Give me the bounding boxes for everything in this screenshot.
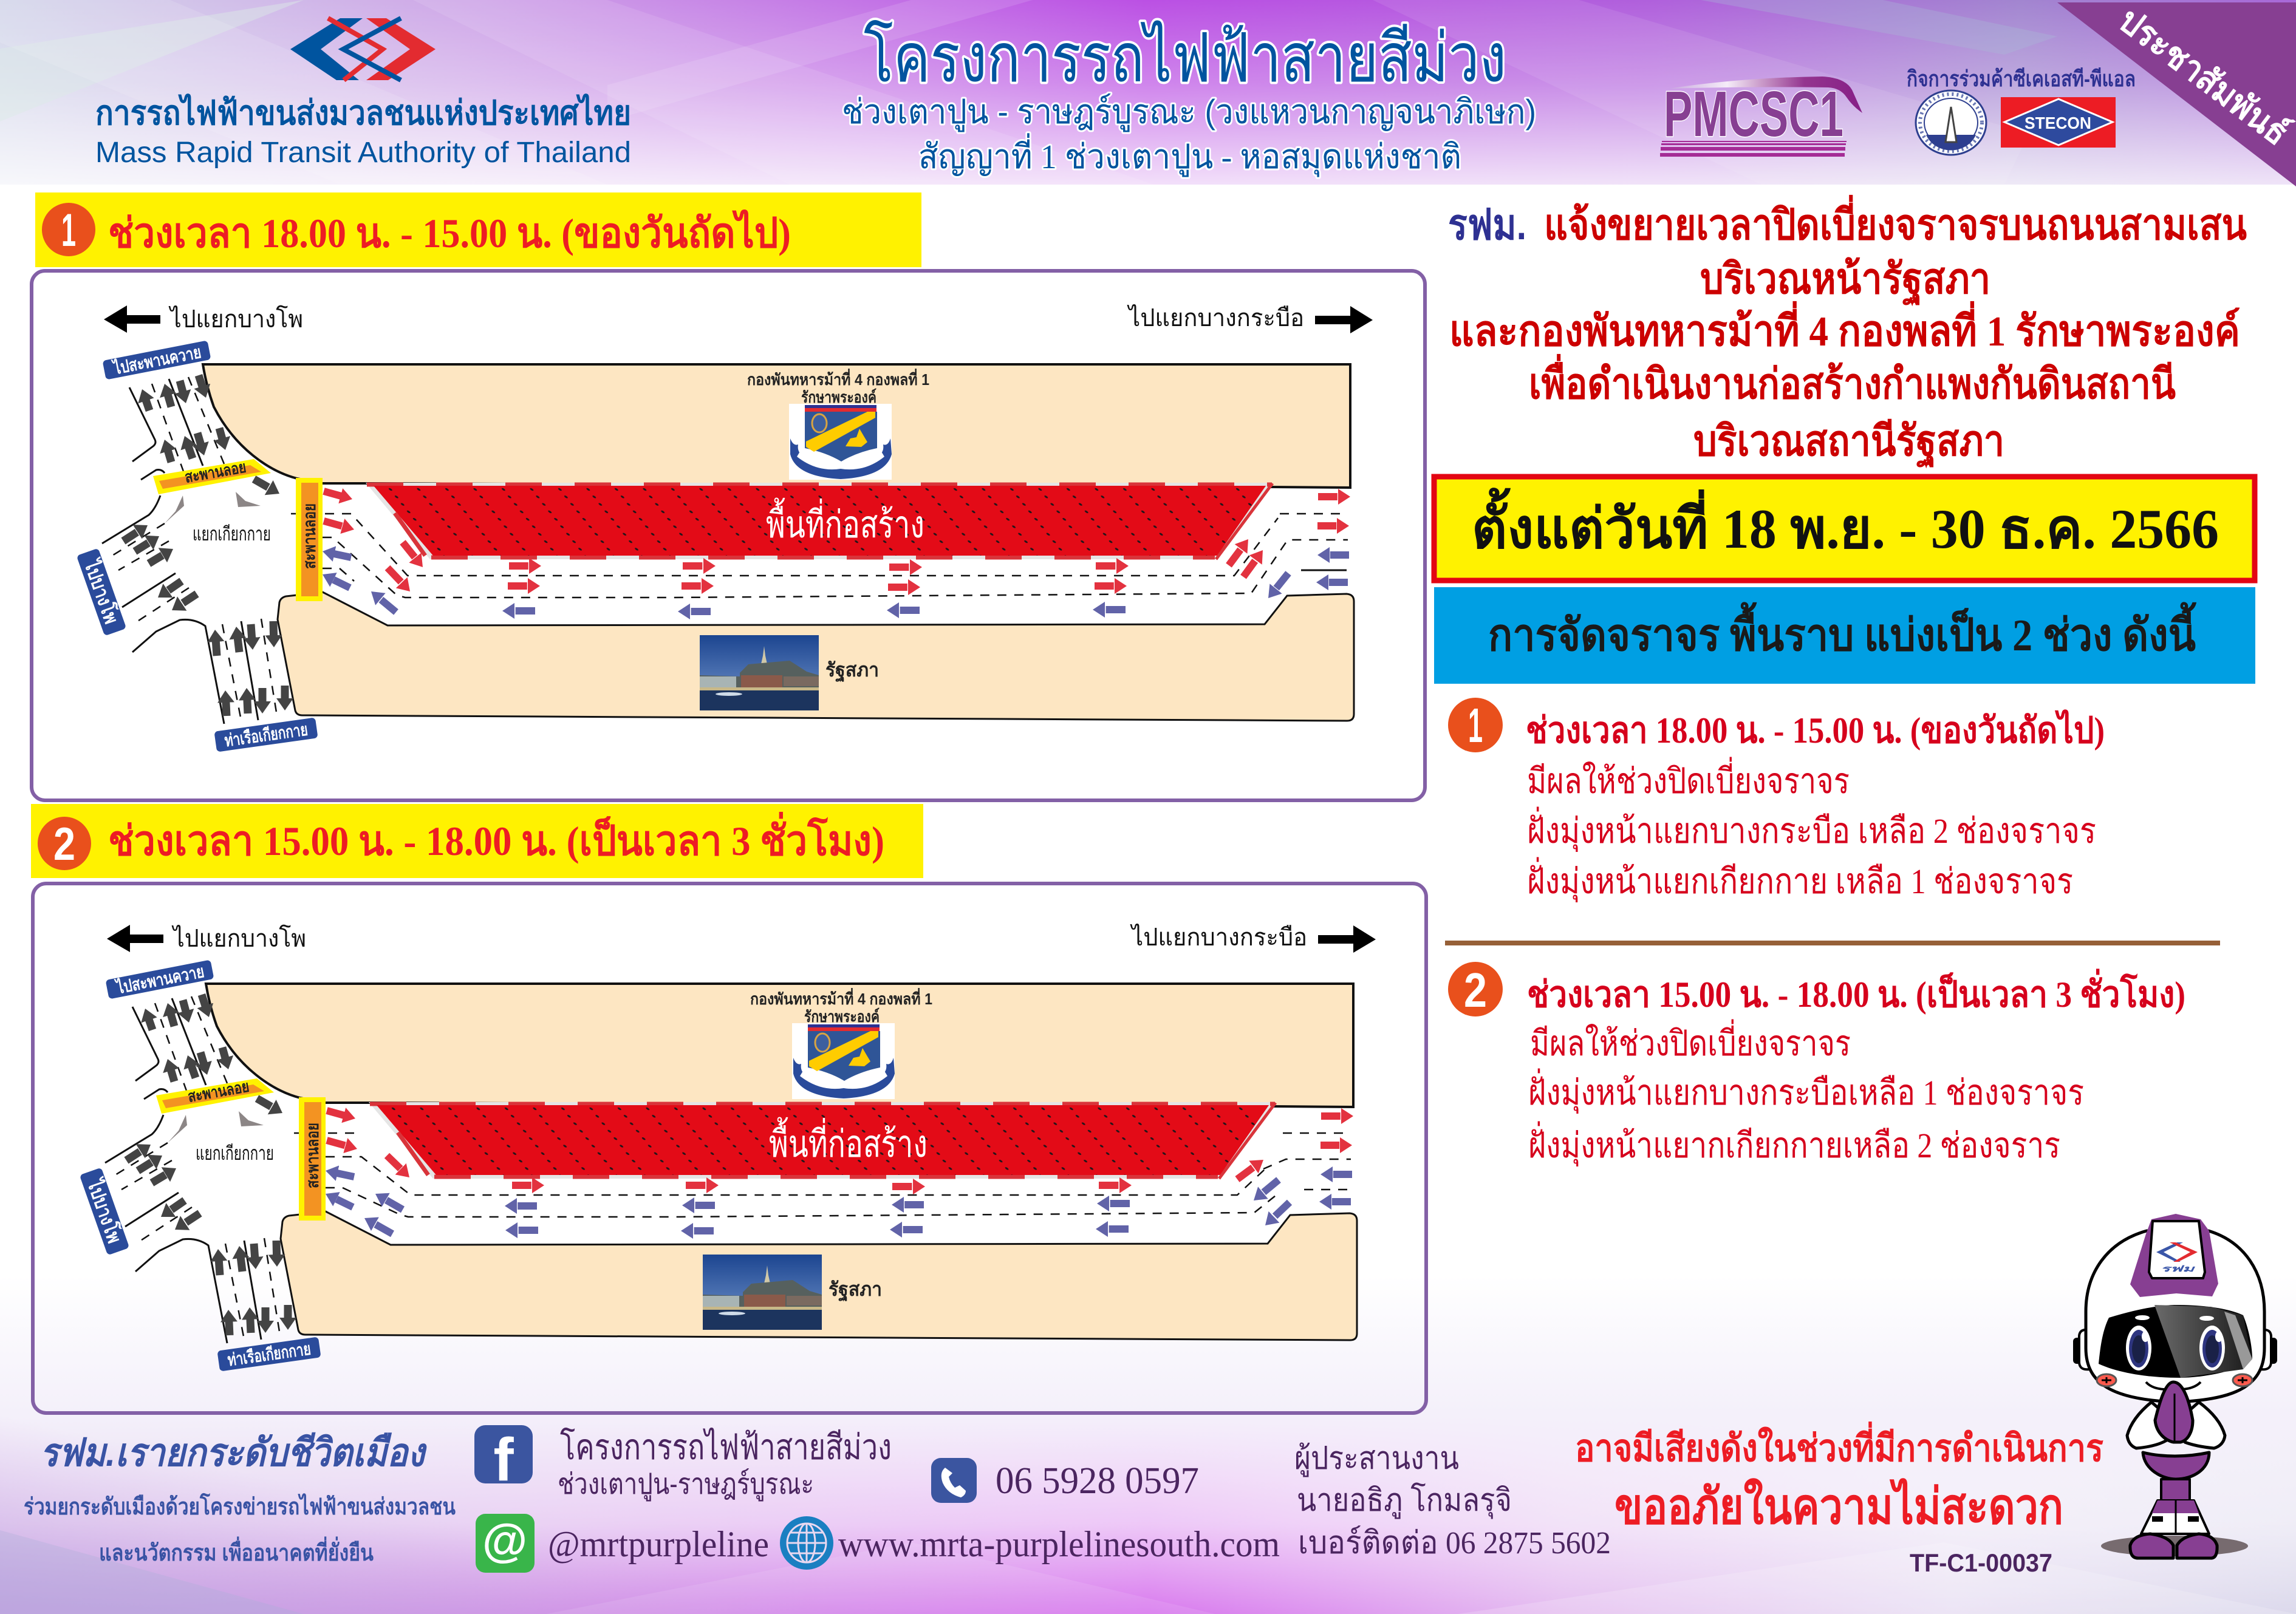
block: cavalry battalion: [206, 984, 1353, 1107]
icon: globe: [780, 1516, 833, 1570]
construction area label: พื้นที่ก่อสร้าง: [769, 1117, 928, 1165]
block: parliament: [278, 592, 1354, 721]
sign: Kiakkai pier: ท่าเรือเกียกกาย: [227, 1340, 312, 1369]
label: cavalry battalion line 2: รักษาพระองค์: [804, 1007, 880, 1026]
STECON logo: [2001, 97, 2116, 148]
label: parliament: รัฐสภา: [829, 1278, 882, 1302]
bridge: diagonal footbridge: [153, 458, 271, 494]
period 2 details: ช่วงเวลา 15.00 น. - 18.00 น. (เป็นเวลา 3 ชั่วโมง): [1527, 969, 2185, 1015]
period 1 details: ฝั่งมุ่งหน้าแยกบางกระบือ เหลือ 2 ช่องจราจร: [1527, 806, 2096, 853]
blue traffic heading: การจัดจราจร พื้นราบ แบ่งเป็น 2 ช่วง ดังนี้: [1488, 602, 2196, 661]
icon: line: [476, 1514, 535, 1573]
icon: facebook: f: [493, 1426, 514, 1494]
announcement heading: รฟม.: [1448, 201, 1526, 248]
road markings: [105, 996, 1351, 1343]
apology notice: ขออภัยในความไม่สะดวก: [1614, 1478, 2063, 1534]
period 1 details: [1448, 698, 2105, 903]
sign: to Bang Pho: ไปบางโพ: [80, 556, 123, 627]
panel: traffic diagram period 1: [32, 271, 1425, 800]
date box: [1434, 477, 2255, 581]
period 1 details: ฝั่งมุ่งหน้าแยกเกียกกาย เหลือ 1 ช่องจราจร: [1527, 857, 2073, 903]
construction area: [369, 1102, 1276, 1179]
header band: [0, 0, 2296, 185]
banner: period 1: 1: [61, 205, 76, 256]
bridge: vertical footbridge: สะพานลอย: [300, 503, 319, 569]
traffic islands: [168, 1111, 264, 1143]
announcement heading: เพื่อดำเนินงานก่อสร้างกำแพงกันดินสถานี: [1529, 353, 2176, 407]
panel: traffic diagram period 2: [33, 884, 1426, 1413]
footer background: [0, 1415, 2296, 1614]
sign: to Saphan Khwai: ไปสะพานควาย: [111, 342, 203, 378]
junction traffic arrows: [123, 375, 285, 716]
banner: period 2: ช่วงเวลา 15.00 น. - 18.00 น. (เป็นเวลา 3 ชั่วโมง): [108, 811, 884, 864]
road markings: [102, 377, 1348, 724]
project subtitle line 2: สัญญาที่ 1 ช่วงเตาปูน - หอสมุดแห่งชาติ: [918, 133, 1461, 177]
sign: to Saphan Khwai: ไปสะพานควาย: [114, 961, 206, 998]
bridge: diagonal footbridge: [156, 1077, 274, 1114]
footer tagline line 1: ร่วมยกระดับเมืองด้วยโครงข่ายรถไฟฟ้าขนส่งมวลชน: [24, 1493, 456, 1520]
website: www.mrta-purplelinesouth.com: [838, 1524, 1280, 1564]
bridge: diagonal footbridge: สะพานลอย: [183, 458, 247, 486]
arrow: to Bang Krabue: [1315, 306, 1373, 333]
period 2 details: มีผลให้ช่วงปิดเบี่ยงจราจร: [1530, 1019, 1851, 1063]
icon: facebook: [474, 1425, 533, 1494]
bridge: vertical footbridge: สะพานลอย: [303, 1123, 322, 1188]
period 2 details: [1448, 962, 2185, 1167]
PMCSC1 logo: PMCSC1: [1664, 78, 1843, 150]
STECON logo: STECON: [2024, 114, 2091, 132]
label: cavalry battalion line 1: กองพันทหารม้าที่ 4 กองพลที่ 1: [747, 368, 929, 389]
mascot: รฟม: [2161, 1264, 2196, 1273]
project title: โครงการรถไฟฟ้าสายสีม่วง: [864, 20, 1506, 96]
MRTA Thai name: การรถไฟฟ้าขนส่งมวลชนแห่งประเทศไทย: [95, 93, 631, 132]
CH. Karnchang seal: [1916, 90, 1986, 155]
label: to Bang Pho: ไปแยกบางโพ: [168, 305, 303, 333]
banner: period 2: [31, 804, 923, 878]
period 2 details: 2: [1464, 963, 1487, 1017]
diagram 2 content: [80, 924, 1376, 1372]
banner: period 1: [35, 192, 921, 267]
MRTA logo: [290, 18, 436, 80]
announcement heading: [1448, 194, 2247, 468]
facebook page subtitle: ช่วงเตาปูน-ราษฎร์บูรณะ: [558, 1468, 814, 1502]
construction area: [366, 483, 1273, 559]
announcement heading: บริเวณสถานีรัฐสภา: [1693, 417, 2004, 468]
line id: @mrtpurpleline: [548, 1524, 769, 1564]
mascot: [2073, 1214, 2277, 1558]
coordinator phone: เบอร์ติดต่อ 06 2875 5602: [1298, 1525, 1611, 1561]
facebook page name: โครงการรถไฟฟ้าสายสีม่วง: [560, 1427, 892, 1467]
lane arrows: westbound blue: [326, 1171, 1352, 1234]
coordinator name: นายอธิภู โกมลรุจิ: [1297, 1482, 1512, 1519]
banner: period 2: 2: [53, 819, 75, 870]
traffic islands: [165, 492, 261, 523]
junction label: แยกเกียกกาย: [196, 1142, 274, 1164]
lower page wash: [0, 1275, 2296, 1415]
sign: to Bang Pho: ไปบางโพ: [83, 1175, 126, 1246]
bridge: diagonal footbridge: สะพานลอย: [186, 1077, 250, 1106]
arrow: to Bang Krabue: [1318, 925, 1376, 953]
construction area label: พื้นที่ก่อสร้าง: [766, 497, 924, 546]
lane arrows: eastbound red: [324, 491, 1350, 591]
banner: period 1: ช่วงเวลา 18.00 น. - 15.00 น. (ของวันถัดไป): [108, 209, 791, 256]
block: cavalry battalion: [203, 364, 1350, 488]
document code: TF-C1-00037: [1910, 1548, 2052, 1577]
announcement heading: บริเวณหน้ารัฐสภา: [1700, 255, 1990, 306]
PMCSC1 logo: [1660, 77, 1862, 157]
bridge: vertical footbridge: [296, 478, 323, 601]
label: to Bang Pho: ไปแยกบางโพ: [171, 925, 306, 952]
bridge: vertical footbridge: [299, 1097, 326, 1221]
coordinator heading: ผู้ประสานงาน: [1294, 1441, 1459, 1477]
junction label: แยกเกียกกาย: [193, 523, 271, 545]
period 1 details: ช่วงเวลา 18.00 น. - 15.00 น. (ของวันถัดไป): [1526, 709, 2105, 751]
label: parliament: รัฐสภา: [825, 659, 879, 683]
phone number: 06 5928 0597: [996, 1460, 1199, 1502]
label: to Bang Krabue: ไปแยกบางกระบือ: [1130, 924, 1307, 951]
public relations corner ribbon: [2057, 0, 2296, 186]
MRTA English name: Mass Rapid Transit Authority of Thailand: [95, 137, 631, 169]
period 1 details: 1: [1468, 698, 1483, 752]
lane arrows: westbound blue: [323, 551, 1349, 612]
sign: Kiakkai pier: ท่าเรือเกียกกาย: [224, 720, 309, 750]
joint venture label: กิจการร่วมค้าซีเคเอสที-พีแอล: [1907, 66, 2136, 91]
label: to Bang Krabue: ไปแยกบางกระบือ: [1127, 304, 1304, 332]
blue traffic heading: [1434, 587, 2255, 684]
icon: phone: [931, 1458, 977, 1503]
icon: line: @: [482, 1515, 527, 1567]
noise notice: อาจมีเสียงดังในช่วงที่มีการดำเนินการ: [1575, 1422, 2103, 1469]
block: parliament: [281, 1211, 1357, 1340]
period 2 details: ฝั่งมุ่งหน้าแยกบางกระบือเหลือ 1 ช่องจราจร: [1528, 1068, 2084, 1114]
footer tagline line 2: และนวัตกรรม เพื่ออนาคตที่ยั่งยืน: [99, 1536, 374, 1566]
project subtitle line 1: ช่วงเตาปูน - ราษฎร์บูรณะ (วงแหวนกาญจนาภิเษก): [842, 92, 1536, 132]
photo: parliament: [700, 635, 819, 710]
emblem: cavalry battalion: [789, 404, 892, 480]
lane arrows: eastbound red: [327, 1111, 1353, 1187]
label: cavalry battalion line 2: รักษาพระองค์: [801, 388, 876, 406]
photo: parliament: [703, 1255, 822, 1330]
arrow: to Bang Pho: [104, 305, 160, 333]
label: cavalry battalion line 1: กองพันทหารม้าที่ 4 กองพลที่ 1: [750, 987, 932, 1008]
date box: ตั้งแต่วันที่ 18 พ.ย. - 30 ธ.ค. 2566: [1472, 488, 2219, 560]
arrow: to Bang Pho: [107, 925, 163, 952]
footer slogan: รฟม.เรายกระดับชีวิตเมือง: [40, 1431, 427, 1474]
period 1 details: มีผลให้ช่วงปิดเบี่ยงจราจร: [1527, 757, 1850, 801]
period 2 details: ฝั่งมุ่งหน้าแยากเกียกกายเหลือ 2 ช่องจราร: [1528, 1121, 2060, 1167]
emblem: cavalry battalion: [792, 1023, 895, 1099]
junction traffic arrows: [126, 995, 288, 1335]
